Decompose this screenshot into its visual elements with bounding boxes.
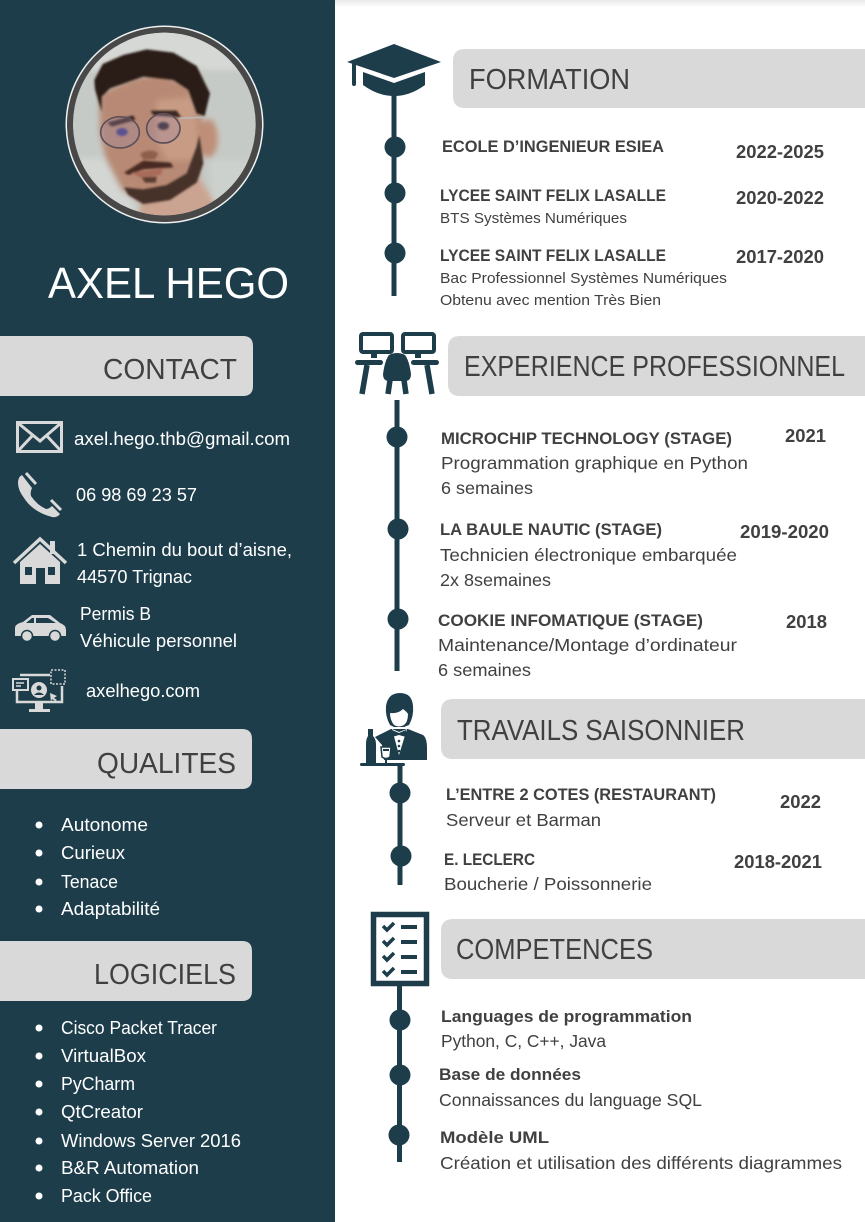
heading: formation: FORMATION xyxy=(469,64,630,96)
entry: la baule nautic: Technicien électronique embarquée xyxy=(440,545,737,565)
entry: microchip: MICROCHIP TECHNOLOGY (STAGE) xyxy=(441,429,732,448)
panel: left sidebar xyxy=(0,0,335,1222)
heading: contact xyxy=(0,336,253,396)
entry: cookie infomatique: 2018 xyxy=(786,612,827,632)
timeline: competences xyxy=(388,986,410,1162)
phone number: 06 98 69 23 57 xyxy=(76,485,197,505)
icon: waiter xyxy=(360,693,427,766)
icon: envelope xyxy=(18,422,62,452)
entry: languages: Languages de programmation xyxy=(441,1007,692,1026)
entry: esiea: 2022-2025 xyxy=(736,142,824,162)
panel: formation xyxy=(347,44,865,309)
entry: microchip: Programmation graphique en Python xyxy=(441,453,748,473)
entry: microchip: 6 semaines xyxy=(441,478,533,498)
entry: lycee bac: Bac Professionnel Systèmes Numériques xyxy=(440,270,727,287)
licence: Permis B xyxy=(80,604,151,624)
icon: website monitor xyxy=(13,670,65,712)
list: logiciels: Windows Server 2016 xyxy=(61,1131,241,1151)
entry: la baule nautic: 2x 8semaines xyxy=(440,570,551,590)
entry: la baule nautic: 2019-2020 xyxy=(740,522,829,542)
list: logiciels: Cisco Packet Tracer xyxy=(61,1018,217,1038)
list: logiciels xyxy=(36,1018,241,1206)
heading: experience xyxy=(448,336,865,396)
entry: esiea xyxy=(442,137,824,162)
entry: microchip xyxy=(441,426,826,498)
name: AXEL HEGO xyxy=(48,259,289,308)
entry: la baule nautic: LA BAULE NAUTIC (STAGE) xyxy=(440,520,662,539)
list: logiciels: PyCharm xyxy=(61,1074,135,1094)
entry: cookie infomatique: Maintenance/Montage d’ordinateur xyxy=(438,635,737,655)
licence xyxy=(80,604,237,651)
entry: base de donnees: Base de données xyxy=(439,1065,581,1084)
address: 44570 Trignac xyxy=(77,567,192,587)
heading: qualites: QUALITES xyxy=(97,748,236,780)
list: qualites xyxy=(36,815,160,919)
list: qualites: Autonome xyxy=(61,815,148,835)
heading: logiciels: LOGICIELS xyxy=(94,959,236,991)
heading: qualites xyxy=(0,729,252,789)
entry: lycee bac: Obtenu avec mention Très Bien xyxy=(440,292,661,309)
website: axelhego.com xyxy=(86,681,200,701)
entry: languages xyxy=(441,1007,692,1051)
address: 1 Chemin du bout d’aisne, xyxy=(77,540,292,560)
entry: cookie infomatique: 6 semaines xyxy=(438,660,531,680)
icon: desks and chair xyxy=(355,334,439,394)
heading: contact: CONTACT xyxy=(103,354,237,386)
entry: cookie infomatique: COOKIE INFOMATIQUE (STAGE) xyxy=(438,611,703,630)
entry: lycee bac xyxy=(440,246,824,309)
entry: lycee bac: LYCEE SAINT FELIX LASALLE xyxy=(440,246,666,265)
entry: base de donnees xyxy=(439,1065,702,1110)
timeline: formation xyxy=(384,94,406,296)
entry: entre 2 cotes: L’ENTRE 2 COTES (RESTAURANT) xyxy=(446,785,716,804)
panel: competences xyxy=(374,914,865,1173)
icon: phone xyxy=(18,473,61,517)
list: logiciels: B&R Automation xyxy=(61,1158,199,1178)
entry: uml: Création et utilisation des différents diagrammes xyxy=(440,1153,842,1173)
heading: travails saisonnier xyxy=(441,699,865,759)
entry: entre 2 cotes: Serveur et Barman xyxy=(446,810,601,830)
heading: formation xyxy=(453,49,865,108)
list: logiciels: Pack Office xyxy=(61,1186,152,1206)
licence: Véhicule personnel xyxy=(80,631,237,651)
list: logiciels: QtCreator xyxy=(61,1102,143,1122)
entry: esiea: ECOLE D’INGENIEUR ESIEA xyxy=(442,137,664,156)
icon: house xyxy=(14,539,66,584)
list: qualites: Curieux xyxy=(61,843,125,863)
heading: competences: COMPETENCES xyxy=(456,934,653,966)
entry: lycee bts: LYCEE SAINT FELIX LASALLE xyxy=(440,186,666,205)
entry: lycee bts xyxy=(440,186,824,227)
timeline: experience xyxy=(386,400,408,671)
entry: la baule nautic xyxy=(440,520,829,590)
heading: competences xyxy=(441,919,865,979)
entry: lycee bac: 2017-2020 xyxy=(736,247,824,267)
entry: lycee bts: BTS Systèmes Numériques xyxy=(440,210,627,227)
list: qualites: Tenace xyxy=(61,872,118,892)
entry: base de donnees: Connaissances du language SQL xyxy=(439,1090,702,1110)
icon: graduation cap xyxy=(347,44,441,96)
heading: logiciels xyxy=(0,941,252,1001)
entry: entre 2 cotes: 2022 xyxy=(780,792,821,812)
address xyxy=(77,540,292,587)
entry: microchip: 2021 xyxy=(785,426,826,446)
entry: uml xyxy=(440,1128,842,1173)
panel: travaux saisonniers xyxy=(360,693,865,894)
entry: leclerc xyxy=(444,850,822,894)
heading: travails saisonnier: TRAVAILS SAISONNIER xyxy=(457,715,745,747)
icon: checklist xyxy=(374,914,426,984)
panel: experience xyxy=(355,334,865,680)
entry: leclerc: Boucherie / Poissonnerie xyxy=(444,874,652,894)
list: logiciels: VirtualBox xyxy=(61,1046,146,1066)
icon: car xyxy=(15,615,66,642)
entry: leclerc: 2018-2021 xyxy=(734,852,822,872)
entry: leclerc: E. LECLERC xyxy=(444,850,535,869)
profile photo xyxy=(66,26,264,224)
entry: uml: Modèle UML xyxy=(440,1128,549,1147)
entry: languages: Python, C, C++, Java xyxy=(441,1031,606,1051)
entry: cookie infomatique xyxy=(438,611,827,680)
timeline: travaux xyxy=(390,766,412,885)
list: qualites: Adaptabilité xyxy=(61,899,160,919)
entry: entre 2 cotes xyxy=(446,785,821,830)
entry: lycee bts: 2020-2022 xyxy=(736,188,824,208)
email: axel.hego.thb@gmail.com xyxy=(74,429,290,449)
